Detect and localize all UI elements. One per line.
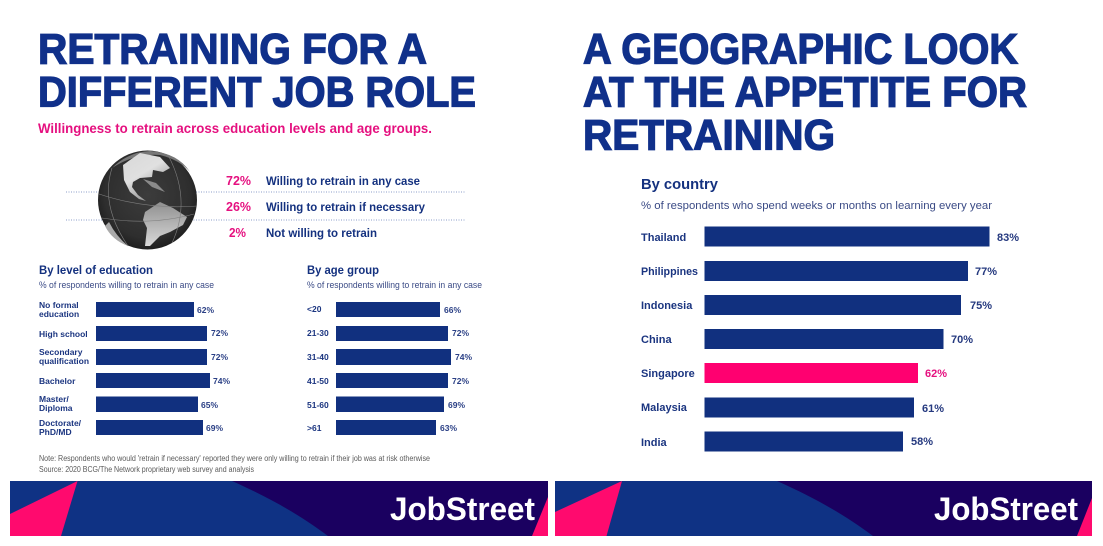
title: right panel: A GEOGRAPHIC LOOK [583, 26, 1018, 74]
bar chart: by age group [307, 263, 482, 435]
bar: secondary qualification 72%: 72% [211, 352, 228, 362]
bar: high school 72%: High school [39, 329, 88, 339]
bar: no formal education 62% [39, 300, 214, 319]
title: left panel [38, 26, 476, 116]
subtitle: Willingness to retrain across education levels and age groups. [38, 120, 432, 136]
panel: geographic look at the appetite for retraining [555, 26, 1092, 536]
chart subtitle: % of respondents who spend weeks or months on learning every year [641, 200, 992, 212]
heading: by level of education: By level of education [39, 263, 153, 277]
heading: by age group: By age group [307, 263, 379, 277]
logo: JobStreet: JobStreet [390, 491, 535, 527]
bar: China 70%: China [641, 334, 672, 346]
bar: 21-30 72%: 72% [452, 328, 469, 338]
logo: JobStreet: JobStreet [934, 491, 1078, 527]
bar: 21-30 72%: 21-30 [307, 328, 329, 338]
bar: 51-60 69% [307, 396, 465, 412]
bar: bachelor 74%: 74% [213, 376, 230, 386]
bar: 21-30 72% [307, 326, 469, 341]
bar: doctorate/PhD/MD 69%: 69% [206, 423, 223, 433]
bar: under 20 66% [307, 302, 461, 317]
bar: doctorate/PhD/MD 69% [39, 418, 223, 437]
bar: China 70% [641, 329, 973, 349]
bar: doctorate/PhD/MD 69%: Doctorate/ [39, 418, 82, 428]
stat: 26%: Willing to retrain if necessary [266, 200, 425, 214]
note and source: Source: 2020 BCG/The Network proprietary web survey and analysis [39, 465, 254, 474]
stat: 72%: 72% [226, 174, 251, 188]
bar: over 61 63% [307, 420, 457, 435]
bar: Singapore 62% highlighted: 62% [925, 368, 947, 380]
bar: China 70%: 70% [951, 334, 973, 346]
bar: under 20 66%: 66% [444, 305, 461, 315]
bar: 41-50 72%: 41-50 [307, 376, 329, 386]
bar: India 58%: India [641, 437, 668, 449]
bar: Malaysia 61% [641, 398, 944, 418]
bar chart: by country [641, 177, 1019, 452]
bar: secondary qualification 72% [39, 347, 228, 366]
bar: Philippines 77%: Philippines [641, 266, 698, 278]
bar: 41-50 72%: 72% [452, 376, 469, 386]
bar: Indonesia 75%: 75% [970, 300, 992, 312]
bar: bachelor 74%: Bachelor [39, 376, 76, 386]
bar: 51-60 69%: 69% [448, 400, 465, 410]
bar: Thailand 83% [641, 226, 1019, 246]
bar: 31-40 74%: 31-40 [307, 352, 329, 362]
bar chart: by level of education [39, 263, 230, 437]
bar: Malaysia 61%: Malaysia [641, 402, 688, 414]
title: right panel [583, 26, 1027, 160]
bar: 31-40 74% [307, 349, 472, 365]
bar: Singapore 62% highlighted [641, 363, 947, 383]
bar: Indonesia 75%: Indonesia [641, 300, 693, 312]
bar: doctorate/PhD/MD 69%: PhD/MD [39, 427, 72, 437]
bar: India 58% [641, 432, 933, 452]
bar: under 20 66%: <20 [307, 304, 322, 314]
bar: master/diploma 65%: Master/ [39, 394, 69, 404]
title: right panel: AT THE APPETITE FOR [583, 68, 1027, 116]
footer banner: right [555, 481, 1092, 536]
bar: high school 72%: 72% [211, 328, 228, 338]
bar: bachelor 74% [39, 373, 230, 388]
bar: secondary qualification 72%: qualification [39, 356, 89, 366]
chart subtitle: % of respondents willing to retrain in any case [39, 280, 214, 290]
title: left panel: DIFFERENT JOB ROLE [38, 68, 476, 116]
bar: Indonesia 75% [641, 295, 992, 315]
bar: Philippines 77%: 77% [975, 266, 997, 278]
footer banner: left [10, 481, 548, 536]
icon: globe [98, 150, 197, 250]
bar: Singapore 62% highlighted: Singapore [641, 368, 695, 380]
bar: master/diploma 65%: 65% [201, 400, 218, 410]
bar: master/diploma 65% [39, 394, 218, 413]
bar: Malaysia 61%: 61% [922, 403, 944, 415]
note and source: Note: Respondents who would 'retrain if necessary' reported they were only willing to retrain if their job was at risk otherwise [39, 454, 430, 463]
stat: 2%: 2% [229, 226, 246, 240]
title: left panel: RETRAINING FOR A [38, 26, 427, 74]
note and source [39, 454, 430, 474]
bar: Thailand 83%: 83% [997, 232, 1019, 244]
bar: 51-60 69%: 51-60 [307, 400, 329, 410]
bar: Philippines 77% [641, 261, 997, 281]
stat: 2%: Not willing to retrain [266, 226, 377, 240]
chart subtitle: % of respondents willing to retrain in any case [307, 280, 482, 290]
heading: by country: By country [641, 177, 718, 193]
bar: over 61 63%: 63% [440, 423, 457, 433]
stat: 72%: Willing to retrain in any case [266, 174, 420, 188]
bar: India 58%: 58% [911, 436, 933, 448]
stat: 26%: 26% [226, 200, 251, 214]
bar: Thailand 83%: Thailand [641, 232, 686, 244]
bar: 41-50 72% [307, 373, 469, 388]
bar: secondary qualification 72%: Secondary [39, 347, 83, 357]
bar: high school 72% [39, 326, 228, 341]
bar: 31-40 74%: 74% [455, 352, 472, 362]
panel: retraining for a different job role [10, 26, 548, 536]
bar: no formal education 62%: education [39, 309, 79, 319]
bar: master/diploma 65%: Diploma [39, 403, 73, 413]
bar: over 61 63%: >61 [307, 423, 322, 433]
bar: no formal education 62%: No formal [39, 300, 79, 310]
title: right panel: RETRAINING [583, 112, 835, 160]
bar: no formal education 62%: 62% [197, 305, 214, 315]
willingness summary [66, 150, 466, 250]
